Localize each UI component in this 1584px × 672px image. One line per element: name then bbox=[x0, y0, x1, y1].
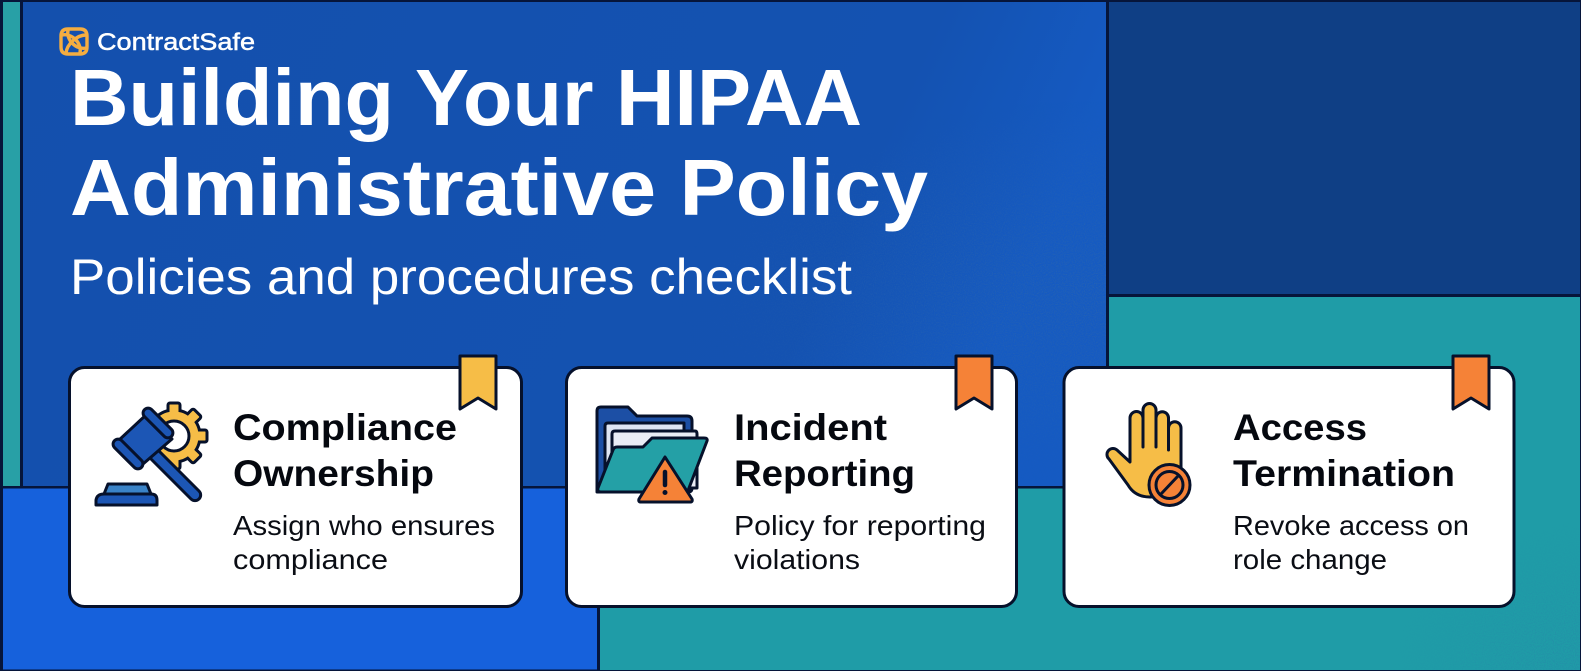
description bbox=[734, 510, 986, 575]
heading: Incident bbox=[734, 407, 887, 448]
description: Revoke access on bbox=[1233, 510, 1469, 541]
heading bbox=[734, 407, 915, 494]
icon: logo mark bbox=[61, 29, 87, 54]
panel: bottom left blue bbox=[3, 488, 597, 670]
bookmark: yellow bbox=[460, 356, 496, 409]
title bbox=[70, 53, 929, 232]
title: Building Your HIPAA bbox=[70, 53, 862, 142]
bookmark: orange bbox=[1453, 356, 1489, 409]
heading bbox=[233, 407, 457, 494]
description bbox=[233, 510, 495, 575]
panel: card Compliance Ownership bbox=[70, 356, 522, 606]
description: violations bbox=[734, 544, 860, 575]
logo: ContractSafe bbox=[61, 29, 255, 56]
heading: Termination bbox=[1233, 453, 1455, 494]
description: role change bbox=[1233, 544, 1387, 575]
icon: folder with warning bbox=[597, 407, 707, 502]
subtitle: Policies and procedures checklist bbox=[70, 249, 852, 305]
description: Assign who ensures bbox=[233, 510, 495, 541]
bookmark: orange bbox=[956, 356, 992, 409]
panel: card Access Termination bbox=[1064, 356, 1514, 606]
heading: Compliance bbox=[233, 407, 457, 448]
heading: Access bbox=[1233, 407, 1367, 448]
icon: gavel and gear bbox=[96, 403, 207, 505]
panel: card Incident Reporting bbox=[566, 356, 1016, 606]
heading bbox=[1233, 407, 1455, 494]
panel: left teal strip bbox=[3, 2, 20, 486]
heading: Reporting bbox=[734, 453, 915, 494]
panel: top right navy bbox=[1109, 2, 1580, 294]
logo wordmark: ContractSafe bbox=[97, 29, 255, 56]
panel: right and bottom teal bbox=[600, 297, 1580, 670]
icon: hand with prohibition badge bbox=[1107, 404, 1190, 506]
description bbox=[1233, 510, 1469, 575]
title: Administrative Policy bbox=[70, 143, 929, 232]
description: compliance bbox=[233, 544, 388, 575]
panel: main blue header bbox=[23, 2, 1106, 486]
description: Policy for reporting bbox=[734, 510, 986, 541]
heading: Ownership bbox=[233, 453, 434, 494]
